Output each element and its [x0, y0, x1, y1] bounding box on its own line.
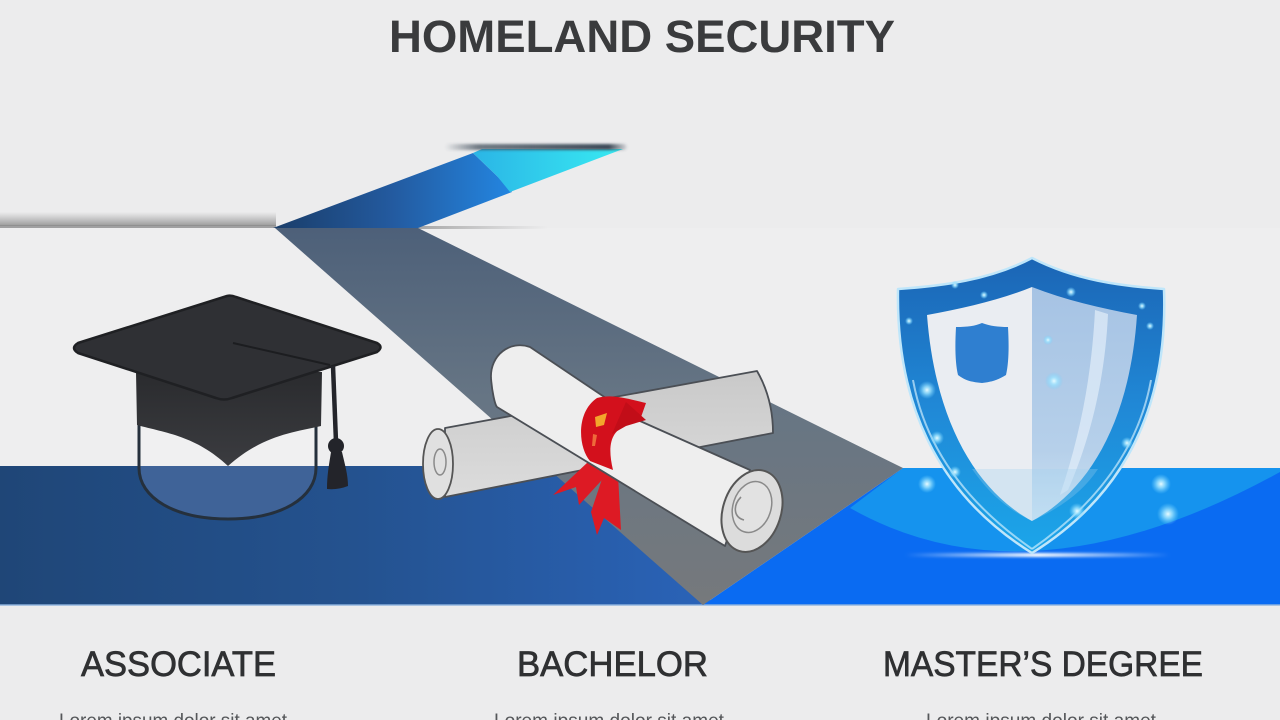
mini shield emblem: [955, 323, 1009, 383]
icon: graduation cap: [74, 296, 380, 519]
gray diagonal path: [275, 228, 903, 605]
heading: associate: ASSOCIATE: [81, 645, 276, 684]
cap tassel: [327, 366, 348, 489]
shield glow line: [905, 553, 1170, 557]
cap board: [74, 296, 380, 400]
red ribbon tails: [553, 462, 621, 535]
cap body: [136, 372, 322, 466]
icon: security shield: [898, 258, 1179, 557]
shield inner left: [927, 287, 1032, 521]
mid shadow line: [418, 226, 548, 229]
blue ribbon path: [273, 149, 623, 228]
title: HOMELAND SECURITY: [389, 11, 895, 62]
cap head outline: [139, 425, 316, 519]
top shadow line: [445, 144, 627, 150]
heading: master's degree: MASTER’S DEGREE: [883, 645, 1203, 684]
shield sparkles: [905, 281, 1179, 525]
left horizontal shadow line: [0, 212, 276, 228]
icon: diploma scroll: [423, 345, 793, 560]
blue horizontal band: [0, 466, 1280, 606]
heading: bachelor: BACHELOR: [517, 645, 708, 684]
shield outer band: [898, 258, 1164, 553]
back scroll: [423, 371, 773, 499]
front scroll: [491, 345, 793, 560]
red ribbon band: [581, 396, 646, 470]
shield inner right: [1032, 287, 1137, 521]
shield lower tint: [972, 469, 1098, 521]
